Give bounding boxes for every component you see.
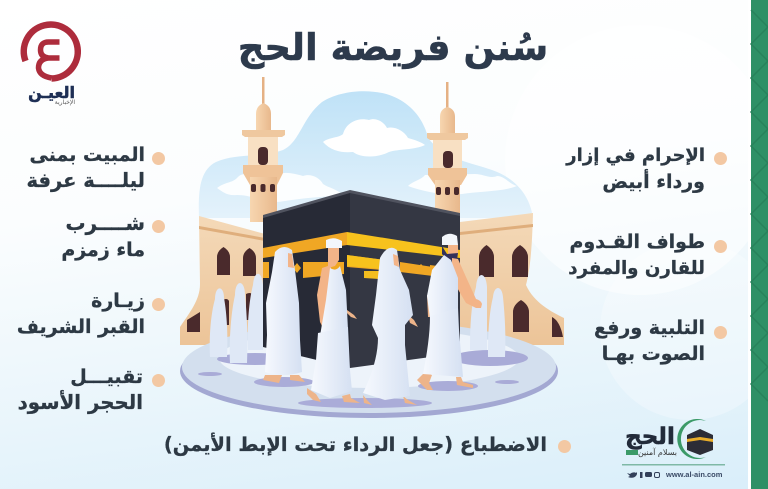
item: bottom: الاضطباع (جعل الرداء تحت الإبط الأيمن) [164,433,547,456]
item: left 3: القبر الشريف [17,316,145,338]
item: right 3: التلبية ورفع [594,317,705,339]
logo: Hajj badge [677,419,713,459]
Hajj logo wordmark: الحج [625,424,675,450]
item: right 2 [568,231,727,279]
item: right 1 [565,145,727,193]
item: left 2 [61,211,165,261]
title: سُنن فريضة الحج [238,26,548,69]
item: left 2: شــــرب [65,211,145,235]
item: right 3: الصوت بهـا [602,343,705,365]
pilgrim 2 [307,238,360,403]
item: right 2: للقارن والمفرد [568,258,705,279]
social icons [627,472,660,478]
pilgrim 1 [263,247,305,383]
illustration: Kaaba scene [180,77,564,418]
green side stripe [751,0,768,489]
item: right 1: الإحرام في إزار [566,145,705,166]
pilgrim 4 [417,234,482,390]
item: left 4: الحجر الأسود [18,391,143,414]
background shapes [505,0,768,489]
website url: www.al-ain.com [666,470,722,479]
item: left 3 [17,290,165,338]
background pilgrims [210,274,505,363]
divider [622,464,725,466]
item: left 1: ليلــــة عرفة [26,169,145,192]
clouds [217,119,517,202]
item: left 4: تقبيـــل [70,366,143,388]
pilgrim 3 [363,248,418,405]
logo subtitle: الإخبارية [55,99,75,106]
Hajj logo tagline: بسلام آمنين [638,448,677,457]
item: left 1: المبيت بمنى [30,144,145,166]
left minaret [242,77,285,222]
tag: green label [626,450,638,455]
item: left 4 [18,366,165,414]
windows [187,245,563,337]
logo: Al-Ain mark [24,25,78,78]
arcade walls [180,216,265,345]
item: left 2: ماء زمزم [61,239,145,261]
floor [180,321,558,418]
logo wordmark: العيـن [28,83,75,102]
Kaaba [263,190,460,368]
item: right 1: ورداء أبيض [602,171,705,193]
item: left 3: زيـارة [91,290,145,312]
item: left 1 [26,144,165,192]
item: right 3 [594,317,727,365]
sky blob [199,91,533,218]
right minaret [427,82,468,220]
item: right 2: طواف القـدوم [569,231,705,253]
